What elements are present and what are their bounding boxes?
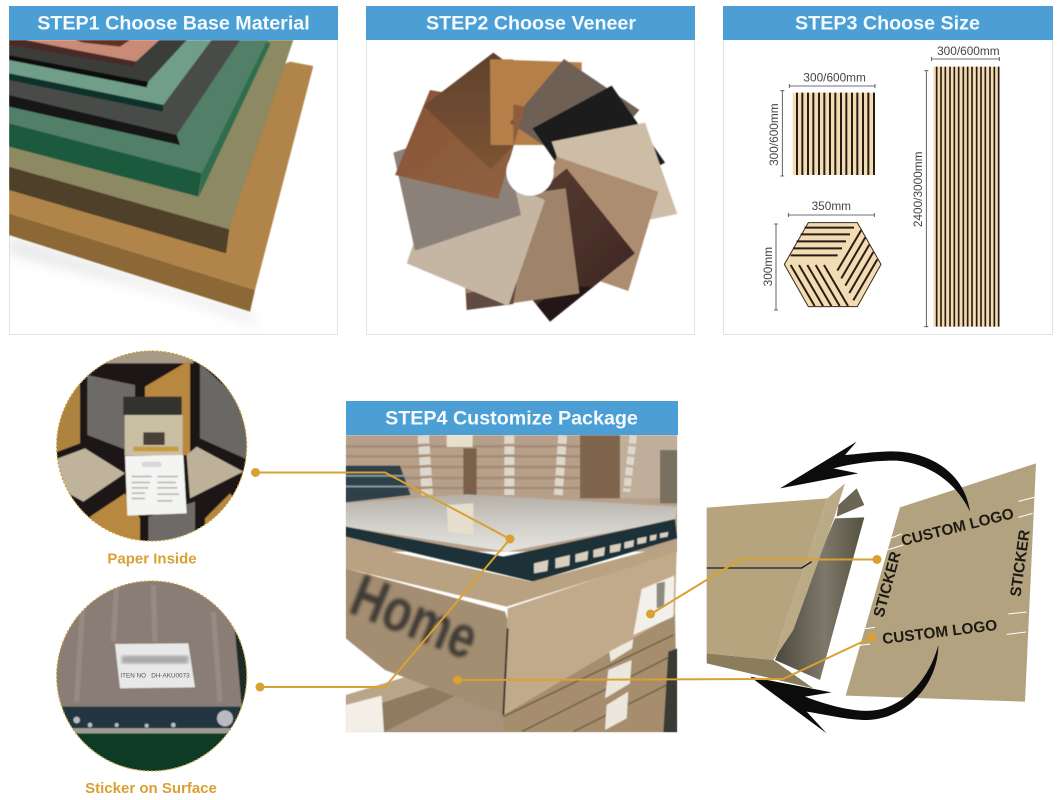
stacked boards photo [9,40,313,325]
panel: step 3 size [723,6,1053,334]
folded carton [707,483,864,688]
hexagon height label: 300mm [761,247,775,286]
sticker item number: ITEN NO DH-AKU0073 [120,673,190,680]
heading: step 2 [366,6,695,40]
connector: custom logo line [453,633,876,684]
connector: sticker on surface line [256,539,510,692]
square height label [767,91,784,176]
size drawings [761,44,1000,327]
carton and panel photo [342,435,677,732]
connector: paper inside line [251,468,514,544]
heading: step 4: STEP4 Customize Package [385,408,638,430]
tall slat panel [933,67,999,327]
tall width label: 300/600mm [937,44,1000,58]
heading: step 1: STEP1 Choose Base Material [37,12,310,34]
hexagon height label [761,224,778,310]
tall height label [911,71,928,327]
heading: step 4 [346,401,678,435]
carton logo lettering: Home [342,562,487,672]
square slat panel [793,93,875,175]
square width label [789,70,875,88]
custom logo bottom: CUSTOM LOGO [881,617,998,648]
heading: step 2: STEP2 Choose Veneer [426,12,636,34]
hexagon width label: 350mm [812,199,851,213]
panel: step 1 base material [9,6,338,334]
panel: step 2 veneer [366,6,695,334]
label: paper inside: Paper Inside [107,550,197,568]
arrow: bottom curved [750,645,938,733]
label: sticker on surface: Sticker on Surface [85,780,217,797]
sticker left: STICKER [871,550,905,619]
flat carton sheet [846,463,1036,702]
callout: paper inside circle [53,348,250,568]
tall height label: 2400/3000mm [911,151,925,227]
connector: sticker line [646,555,882,618]
heading: step 3: STEP3 Choose Size [795,12,980,34]
custom logo top: CUSTOM LOGO [899,505,1016,550]
sticker right: STICKER [1007,529,1034,598]
hexagon slat panel [784,223,881,307]
veneer fan samples [393,53,677,322]
heading: step 3 [723,6,1053,40]
square width label: 300/600mm [803,70,866,84]
hexagon width label [788,199,874,217]
square height label: 300/600mm [767,103,781,166]
callout: sticker on surface circle [53,578,250,797]
panel: step 4 package photo [342,401,678,732]
arrow: top curved [780,442,970,512]
packaging flat diagram [707,442,1036,733]
heading: step 1 [9,6,338,40]
